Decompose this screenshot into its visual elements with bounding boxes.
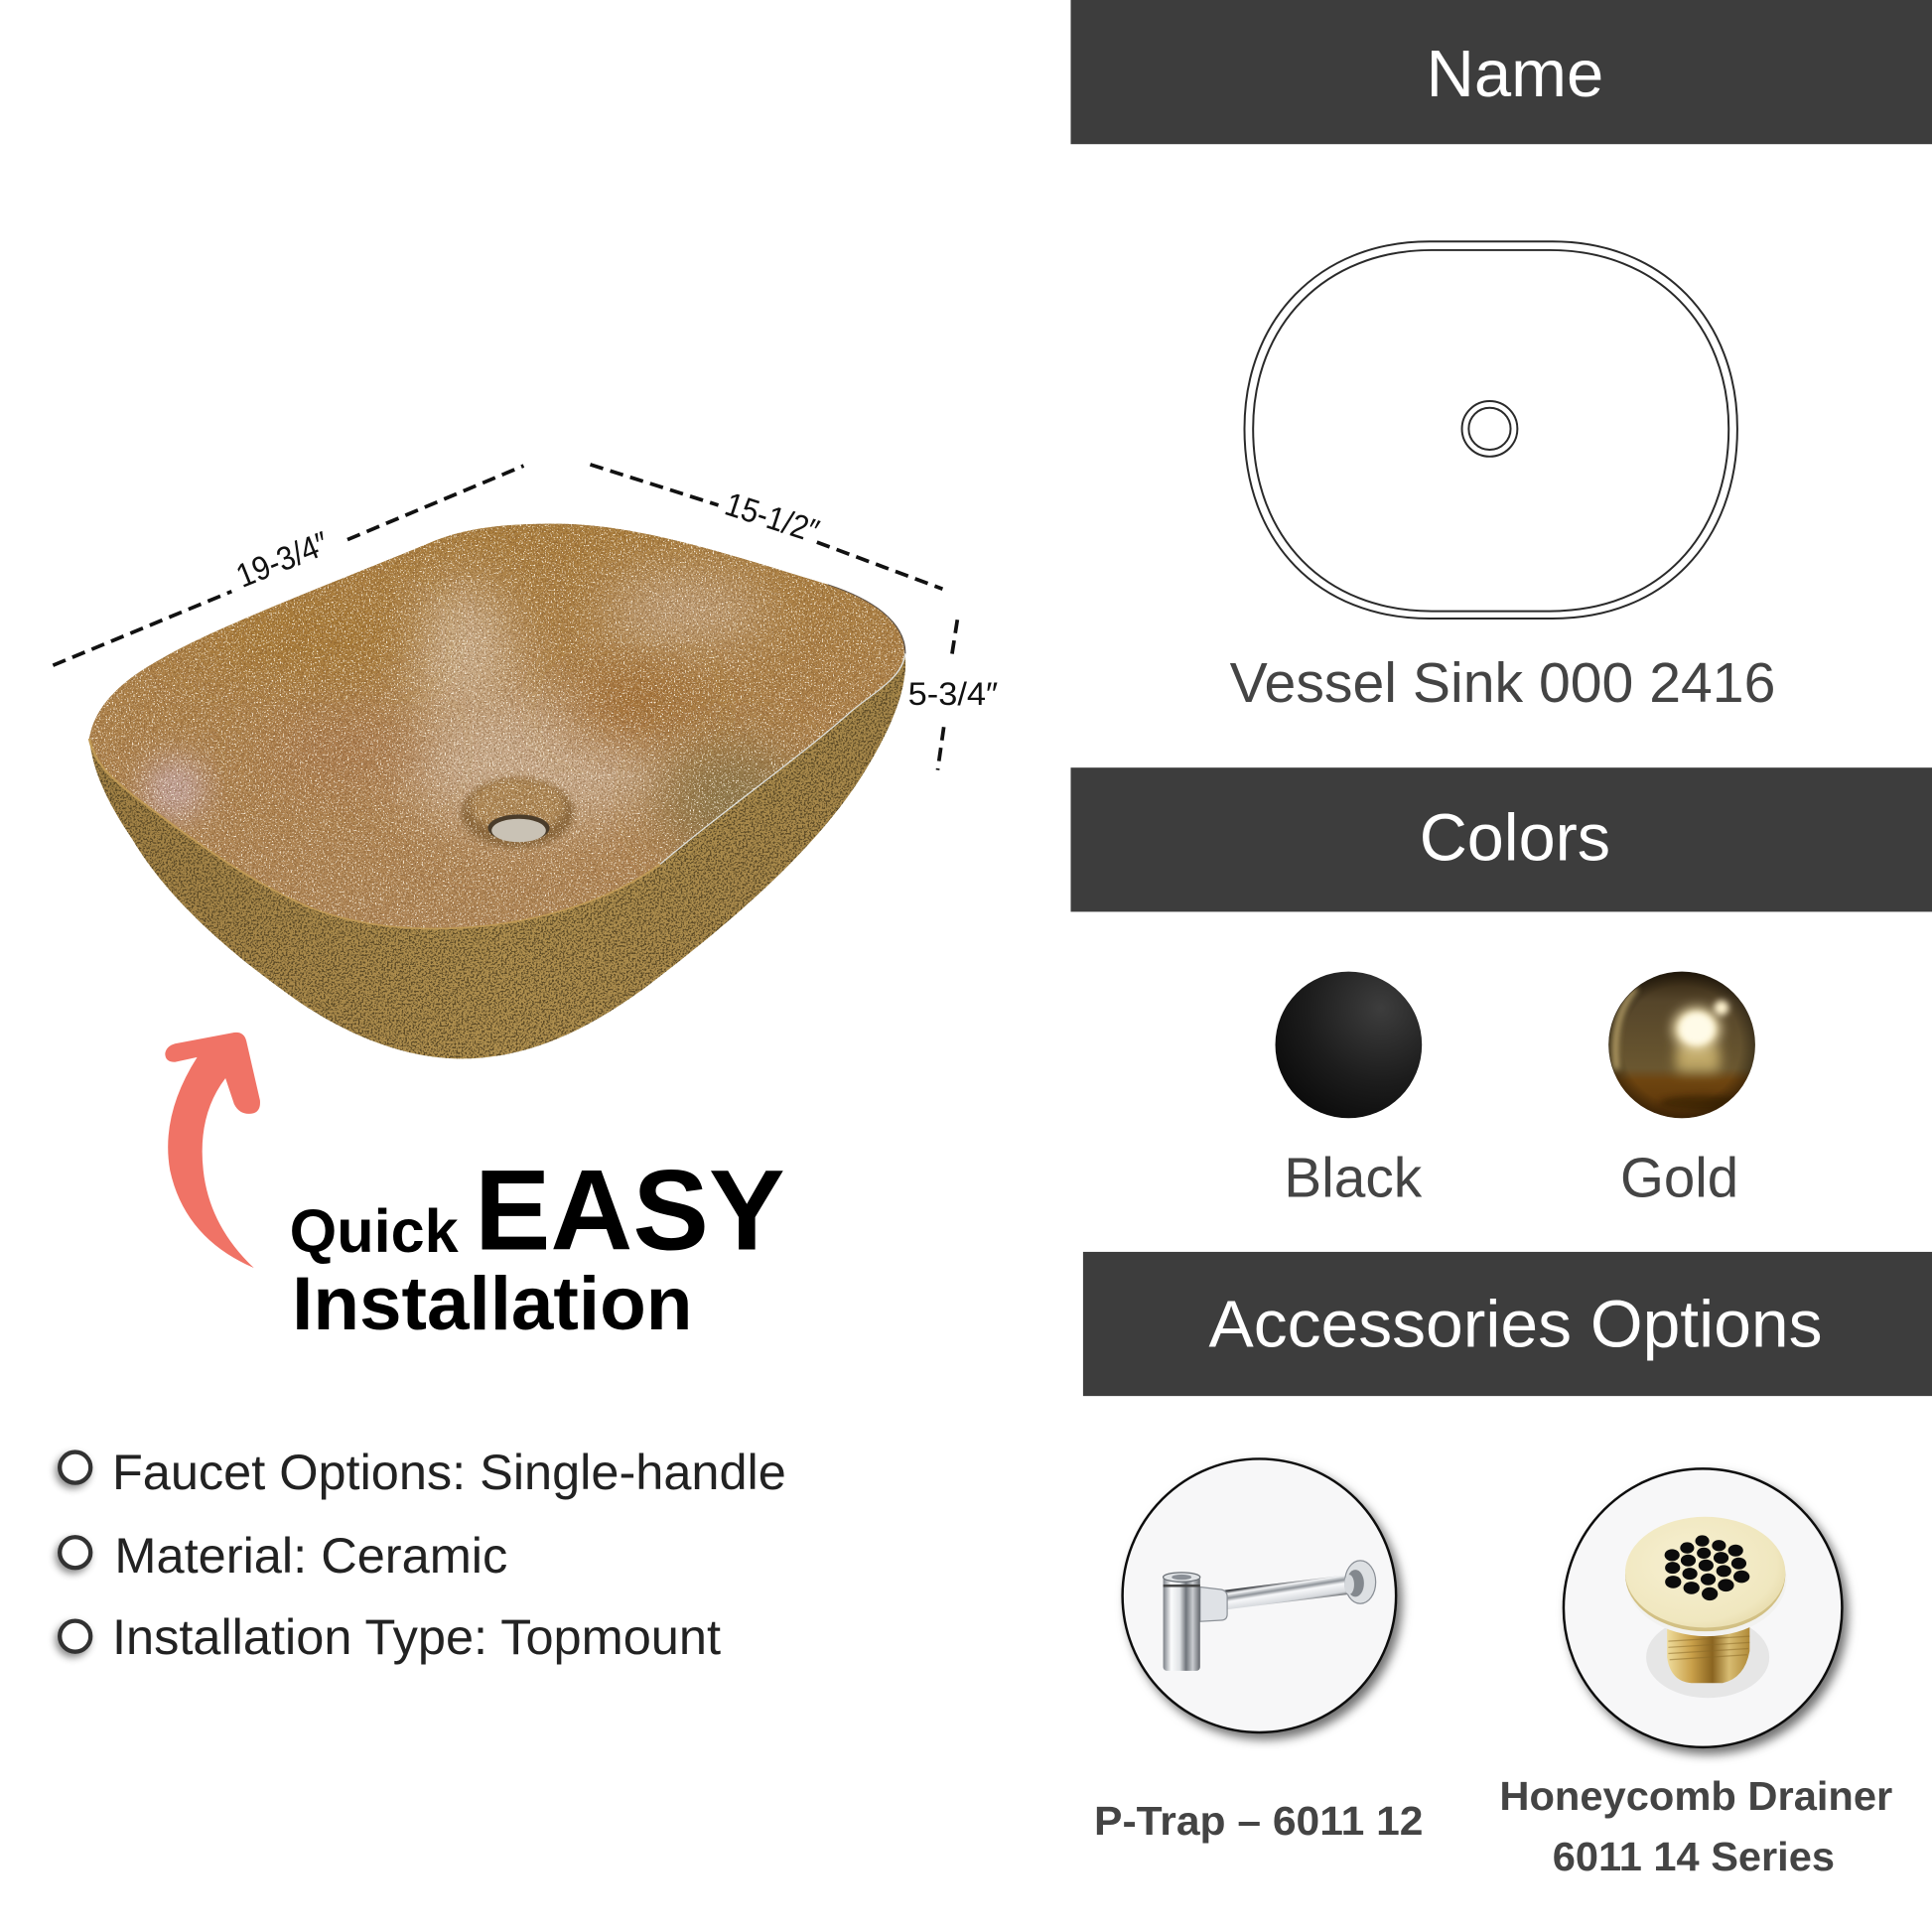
heading: Quick EASY Installation	[290, 1147, 785, 1346]
heading: Accessories Options: Accessories Options	[1208, 1287, 1823, 1361]
dimension: depth 15-1/2: 15-1/2″	[721, 486, 823, 551]
sink rim edge	[89, 585, 905, 928]
heading: Colors	[1070, 767, 1932, 911]
heading: Name	[1070, 0, 1932, 144]
arrow: curved coral arrow pointing to sink	[165, 1033, 260, 1268]
drainer label: Honeycomb Drainer	[1499, 1773, 1892, 1819]
dimension: width 19-3/4	[53, 466, 523, 665]
product name: Vessel Sink 000 2416	[1230, 652, 1775, 715]
bullet: installation type: Installation Type: Topmount	[112, 1608, 721, 1665]
accessory: p-trap: P-Trap – 6011 12	[1094, 1798, 1423, 1844]
accessory: honeycomb drainer	[1499, 1468, 1892, 1879]
icon: gold honeycomb drain	[1625, 1517, 1787, 1698]
panel: name	[1070, 0, 1932, 715]
heading: Name: Name	[1427, 37, 1603, 111]
heading: Quick EASY Installation: Installation	[292, 1262, 692, 1346]
sink top-view outline	[1244, 241, 1737, 619]
bullet: faucet options: Faucet Options: Single-handle	[112, 1444, 786, 1500]
swatch: black: Black	[1284, 1148, 1423, 1210]
swatch: gold: Gold	[1620, 1148, 1738, 1210]
icon: chrome p-trap	[1164, 1561, 1376, 1671]
accessory: p-trap	[1094, 1458, 1423, 1844]
dimension: depth 15-1/2	[590, 465, 942, 589]
drainer label	[1499, 1773, 1892, 1879]
drainer label: 6011 14 Series	[1553, 1834, 1835, 1879]
feature list	[60, 1444, 786, 1665]
heading: Quick EASY Installation: EASY	[475, 1147, 785, 1274]
swatch: gold	[1608, 972, 1755, 1210]
dimension: height 5-3/4	[908, 620, 998, 770]
sink drain hole	[487, 814, 550, 842]
panel: accessories options	[1083, 1252, 1932, 1879]
panel: colors	[1070, 767, 1932, 1210]
sink basin interior	[89, 524, 905, 928]
sink outer body	[73, 505, 924, 1072]
heading: Quick EASY Installation: Quick	[290, 1197, 459, 1265]
swatch: black	[1276, 972, 1423, 1210]
heading: Accessories Options	[1083, 1252, 1932, 1396]
heading: Colors: Colors	[1420, 800, 1610, 875]
panel: sink product photo with dimensions	[53, 465, 998, 1072]
dimension: width 19-3/4: 19-3/4″	[231, 525, 335, 596]
bullet: material: Material: Ceramic	[114, 1527, 507, 1584]
dimension: height 5-3/4: 5-3/4″	[908, 676, 998, 712]
